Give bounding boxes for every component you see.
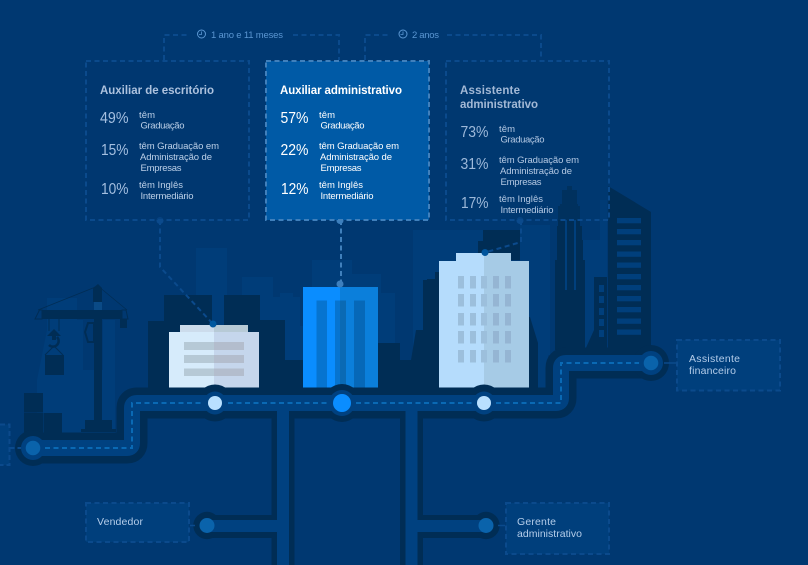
connector: panel 3 to building 3: [482, 217, 524, 256]
panel: auxiliar de escritório: Auxiliar de escritório: [100, 85, 214, 97]
panel: assistente administrativo: 31%: [460, 156, 488, 173]
panel: auxiliar administrativo: 12%: [281, 181, 308, 198]
node: vendedor: [200, 518, 214, 533]
box: gerente administrativo: [498, 503, 609, 554]
slanted office tower: [608, 186, 651, 352]
panel: auxiliar de escritório: 10%: [101, 181, 128, 198]
box: assistente financeiro: [664, 340, 780, 390]
node: assistente administrativo: [472, 392, 496, 414]
node: auxiliar administrativo: [329, 390, 355, 416]
panel: auxiliar de escritório: [86, 61, 249, 220]
timeline: 1 ano e 11 meses: 1 ano e 11 meses: [211, 30, 283, 41]
panel: assistente administrativo: 17%: [461, 195, 488, 212]
box: assistente financeiro: Assistente: [689, 353, 740, 365]
office building 1: [169, 325, 259, 389]
panel: assistente administrativo: administrativo: [460, 99, 538, 111]
panel: auxiliar administrativo: Empresas: [320, 163, 362, 174]
box: cropped left role: [0, 424, 21, 465]
panel: assistente administrativo: Intermediário: [500, 205, 554, 216]
office building 2: [303, 287, 378, 388]
panel: assistente administrativo: 73%: [460, 124, 488, 141]
panel: auxiliar administrativo: Graduação: [320, 120, 364, 132]
node: assistente financeiro: [639, 351, 663, 375]
panel: auxiliar de escritório: Graduação: [140, 120, 184, 132]
node: auxiliar de escritório: [204, 392, 226, 414]
panel: auxiliar de escritório: Empresas: [140, 163, 182, 174]
office building 3: [439, 253, 529, 388]
panel: assistente administrativo: [446, 61, 609, 220]
box: vendedor: Vendedor: [97, 516, 144, 528]
panel: auxiliar de escritório: têm Graduação em: [139, 141, 219, 152]
box: gerente administrativo: administrativo: [517, 528, 582, 540]
panel: auxiliar administrativo: 22%: [280, 142, 308, 159]
short building: [585, 277, 607, 350]
panel: assistente administrativo: Assistente: [460, 85, 520, 97]
panel: assistente administrativo: têm: [499, 124, 515, 135]
node: left start: [21, 436, 45, 460]
panel: assistente administrativo: Empresas: [500, 177, 542, 188]
dark skyline: [148, 230, 538, 390]
panel: auxiliar administrativo: têm: [319, 110, 335, 121]
panel: auxiliar de escritório: têm: [139, 110, 155, 121]
timeline: 2 anos: 2 anos: [412, 30, 439, 41]
box: assistente financeiro: financeiro: [689, 365, 736, 377]
box: gerente administrativo: Gerente: [517, 516, 556, 528]
connector: panel 2 to building 2: [336, 217, 344, 288]
panel: auxiliar de escritório: 15%: [101, 142, 128, 159]
crane: [24, 284, 128, 434]
timeline: 2 anos: [365, 30, 541, 60]
node: gerente administrativo: [478, 518, 494, 533]
box: vendedor: [86, 503, 195, 542]
panel: assistente administrativo: Graduação: [500, 134, 544, 146]
panel: auxiliar de escritório: têm Inglês: [139, 180, 183, 191]
background skyline: [37, 200, 607, 433]
career path road: [15, 345, 669, 565]
panel: assistente administrativo: Administração de: [500, 166, 572, 177]
connector: panel 1 to building 1: [156, 217, 216, 328]
panel: auxiliar de escritório: Intermediário: [140, 191, 194, 202]
tall tower: [555, 186, 585, 350]
panel: auxiliar administrativo: [266, 61, 429, 220]
panel: auxiliar administrativo: 57%: [280, 110, 308, 127]
panel: auxiliar administrativo: têm Inglês: [319, 180, 363, 191]
timeline: 1 ano e 11 meses: [164, 30, 339, 60]
panel: auxiliar administrativo: Administração de: [320, 152, 392, 163]
panel: assistente administrativo: têm Inglês: [499, 194, 543, 205]
panel: auxiliar administrativo: têm Graduação em: [319, 141, 399, 152]
panel: auxiliar administrativo: Intermediário: [320, 191, 374, 202]
panel: assistente administrativo: têm Graduação em: [499, 155, 579, 166]
panel: auxiliar administrativo: Auxiliar administrativo: [280, 85, 402, 97]
panel: auxiliar de escritório: 49%: [100, 110, 128, 127]
panel: auxiliar de escritório: Administração de: [140, 152, 212, 163]
